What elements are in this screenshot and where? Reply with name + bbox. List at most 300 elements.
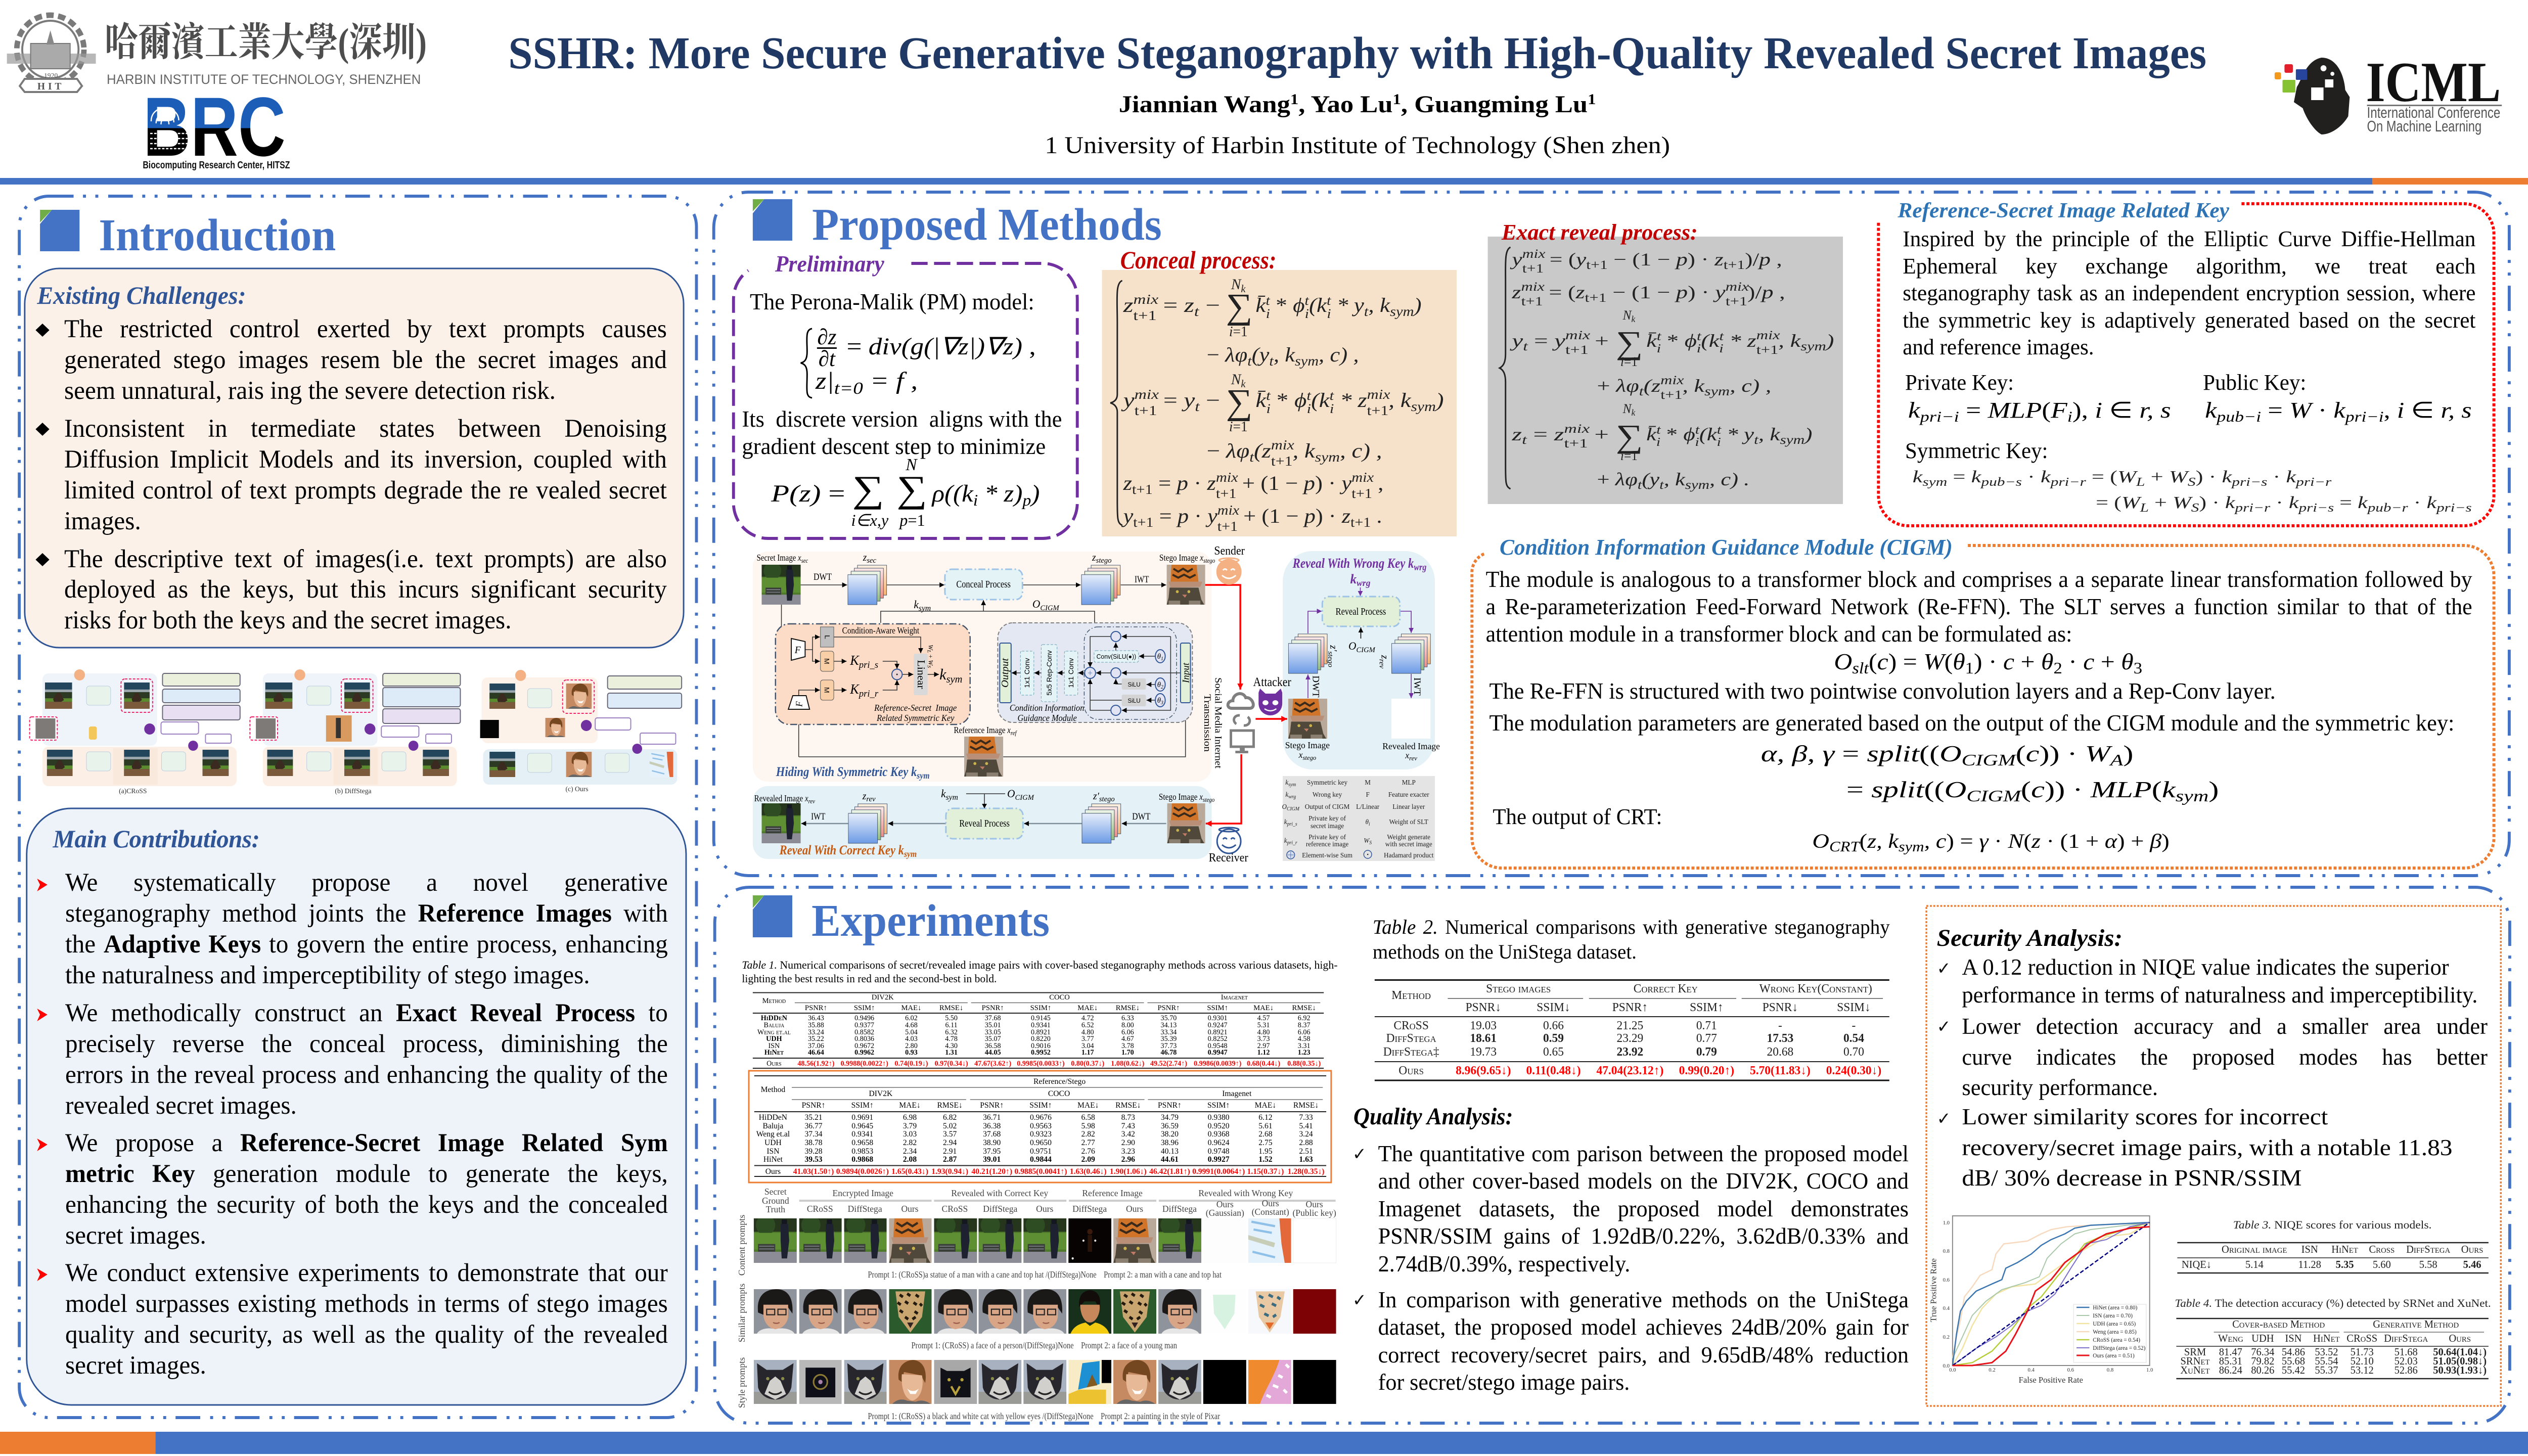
table 1b: reference/stego: 6.82	[943, 1113, 957, 1122]
logo: Harbin Institute of Technology: HIT	[37, 81, 64, 92]
formula: modulation: CIGM	[1962, 751, 2017, 769]
formula panel: exact reveal process: =	[1527, 424, 1554, 444]
table 1: secret/revealed: 4.68	[905, 1021, 918, 1029]
legend: symbols: wrg	[1288, 794, 1296, 800]
formula: SLT: c + θ	[2083, 649, 2132, 674]
text: quality point 1: Imagenet datasets, the proposed model demonstrates	[1378, 1196, 1909, 1221]
formula panel: conceal process: p) · z	[1304, 505, 1349, 527]
formula panel: conceal process: , k	[1292, 440, 1316, 462]
formula panel: exact reveal process: ∑	[1616, 325, 1643, 360]
legend: ROC: CRoSS (area = 0.54)	[2093, 1337, 2140, 1343]
formula panel: exact reveal process: p ,	[1762, 282, 1782, 302]
module: condition information guidance: Input	[1181, 662, 1191, 684]
table 1b: reference/stego: 8.73	[1121, 1113, 1135, 1122]
text: contribution 1: the naturalness and imperceptibility of stego images.	[65, 961, 590, 989]
logo text: english name: HARBIN INSTITUTE OF TECHNOLOGY, SHENZHEN	[107, 72, 421, 87]
legend: symbols: k	[1284, 837, 1287, 844]
authors: , Guangming Lu	[1401, 92, 1588, 118]
table 3: NIQE: ISN	[2301, 1244, 2318, 1255]
formula panel: conceal process: N	[1231, 372, 1241, 388]
formula panel: exact reveal process: ϕ	[1685, 331, 1694, 351]
table 4: detection accuracy: 54.86	[2282, 1347, 2305, 1358]
formula panel: exact reveal process: t	[1659, 478, 1664, 492]
legend: symbols: Element-wise Sum	[1302, 851, 1353, 859]
icon: section marker	[40, 210, 79, 251]
text: DWT: DWT	[1311, 675, 1321, 698]
formula: SLT: 2	[2053, 659, 2062, 677]
formula: SLT: O	[1834, 649, 1850, 674]
table 1: secret/revealed: 0.8252	[1208, 1035, 1228, 1043]
table 1: secret/revealed: 0.9985(0.0033↑)	[1017, 1060, 1065, 1068]
text: symmetric key: Symmetric Key:	[1905, 439, 2048, 463]
table 2: generative comparison: 0.65	[1543, 1045, 1564, 1059]
formula panel: exact reveal process: mix	[1522, 247, 1545, 261]
formula: symmetric key: k	[1971, 468, 1978, 486]
table 1b: reference/stego: Weng et.al	[756, 1130, 790, 1139]
table 2: generative comparison: Method	[1391, 989, 1431, 1002]
text: module description: a Re-parameterization Feed-Forward Network (Re-FFN). The SLT serves a function similar to that of the	[1486, 594, 2472, 619]
formula panel: exact reveal process: t+1	[1565, 343, 1589, 357]
formula panel: conceal process: t	[1327, 293, 1331, 308]
formula panel: exact reveal process: +	[1589, 331, 1609, 351]
caption: table 4: Table 4. The detection accuracy (%) detected by SRNet and XuNet.	[2175, 1297, 2491, 1309]
legend: symbols: Wrong key	[1313, 791, 1342, 798]
formula: modulation: c)) · MLP (k	[2031, 777, 2172, 802]
table 4: detection accuracy: Generative Method	[2373, 1319, 2459, 1330]
box: condition information guidance module	[1472, 535, 2494, 868]
formula: SLT: (	[1869, 649, 1877, 674]
formula: symmetric key: pri−s	[2297, 502, 2334, 515]
table 1b: reference/stego: 36.71	[983, 1113, 1001, 1122]
table 1: secret/revealed: 6.02	[905, 1014, 918, 1022]
table 1b: reference/stego: 39.53	[804, 1155, 823, 1164]
formula: CRT: sym	[1899, 839, 1924, 854]
formula panel: conceal process: k̄	[1255, 389, 1265, 412]
formula panel: exact reveal process: t+1	[1660, 388, 1682, 402]
module: reference-secret symmetric key	[776, 624, 970, 724]
formula: private key: i	[2067, 409, 2072, 425]
label: revealed image: rev	[1409, 755, 1417, 762]
image: stego cat	[1167, 565, 1205, 605]
logo: ICML	[2275, 51, 2502, 135]
table 1b: reference/stego: Imagenet	[1222, 1089, 1252, 1098]
module: condition information guidance: 5x5 Rep-Conv	[1045, 650, 1053, 696]
table 1: secret/revealed: 1.08(0.62↓)	[1111, 1060, 1145, 1068]
process: reveal	[946, 808, 1023, 839]
diagram: Ours	[480, 670, 682, 793]
table 1: secret/revealed: 0.9986(0.0039↑)	[1194, 1060, 1242, 1068]
label: k sym: k	[914, 599, 919, 611]
label: stego image: x	[1298, 750, 1303, 760]
table 1: secret/revealed: 6.06	[1298, 1028, 1311, 1036]
heading: preliminary: Preliminary	[775, 251, 885, 277]
table 1b: reference/stego: 1.15(0.37↓)	[1247, 1167, 1284, 1176]
table 1b: reference/stego: DIV2K	[869, 1089, 893, 1098]
heading: exact reveal process: Exact reveal process:	[1501, 220, 1698, 245]
formula panel: conceal process: , k	[1388, 389, 1412, 412]
formula panel: exact reveal process: t+1	[1585, 291, 1607, 305]
text: sender: Sender	[1214, 544, 1245, 558]
table 1: secret/revealed: 8.00	[1121, 1021, 1134, 1029]
panel: proposed methods	[714, 192, 2509, 876]
table 4: detection accuracy: 51.73	[2351, 1347, 2374, 1358]
table 1b: reference/stego: PSNR↑	[1158, 1101, 1182, 1110]
icon: receiver face	[1217, 828, 1241, 853]
formula: public key: ,	[2384, 398, 2397, 423]
legend: symbols: O	[1282, 803, 1287, 810]
table 1: secret/revealed: SSIM↑	[1207, 1004, 1228, 1012]
table 1: secret/revealed: 1.12	[1257, 1049, 1270, 1057]
module: condition information guidance: Guidance Module	[1018, 713, 1077, 723]
module: reference-secret symmetric key: S	[926, 665, 932, 668]
grid headers: (Gaussian)	[1206, 1208, 1244, 1218]
table 1b: reference/stego: Ours	[765, 1167, 781, 1176]
formula panel: conceal process: t+1	[1133, 515, 1154, 530]
table 1: secret/revealed: 49.52(2.74↑)	[1150, 1060, 1187, 1068]
table 1: secret/revealed: MAE↓	[1077, 1004, 1098, 1012]
table 1: secret/revealed: 0.9947	[1208, 1049, 1228, 1057]
process: conceal: Conceal Process	[956, 579, 1011, 590]
table 1b: reference/stego: 0.9853	[851, 1147, 873, 1156]
module: condition information guidance: 1x1 Conv	[1023, 658, 1031, 688]
grid headers: DiffStega	[1162, 1204, 1197, 1214]
icon: sync arrows	[1234, 715, 1250, 725]
formula: PM model: = div(g(|∇z|)∇z) ,	[846, 334, 1036, 360]
text: contribution 2: errors in the reveal process and enhancing the quality of the	[65, 1060, 668, 1088]
icon: section marker	[753, 895, 792, 937]
icon: section marker	[753, 199, 792, 241]
table 1b: reference/stego: 37.68	[983, 1130, 1001, 1139]
text: contribution 3: secret images.	[65, 1220, 206, 1249]
table 2: generative comparison: 47.04(23.12↑)	[1597, 1064, 1663, 1077]
legend: symbols: pri_s	[1287, 822, 1297, 827]
table 1b: reference/stego: 2.08	[903, 1155, 917, 1164]
formula panel: conceal process: * z	[1334, 389, 1367, 412]
text: security point 3	[1962, 1104, 2453, 1191]
formula panel: exact reveal process: t+1	[1726, 295, 1747, 308]
module: reference-secret symmetric key: K	[850, 653, 859, 668]
table 1: secret/revealed: 33.34	[1161, 1028, 1177, 1036]
table 4: detection accuracy: 51.68	[2395, 1347, 2418, 1358]
text: contribution 1	[65, 867, 668, 993]
text: module description	[1486, 566, 2472, 652]
formula panel: conceal process: p · y	[1178, 505, 1216, 527]
table 1b: reference/stego: 2.88	[1299, 1139, 1313, 1147]
table 1: secret/revealed: 6.52	[1081, 1021, 1094, 1029]
table 1b: reference/stego: PSNR↑	[980, 1101, 1004, 1110]
table 1: secret/revealed: Ours	[766, 1060, 782, 1068]
heading: main contributions: Main Contributions:	[53, 825, 260, 853]
formula: public key: i ∈ r, s	[2397, 398, 2466, 423]
formula panel: exact reveal process: ∑	[1616, 418, 1643, 454]
module: reference-secret symmetric key: pri_r	[858, 689, 879, 699]
table 1: secret/revealed: 33.24	[808, 1028, 824, 1036]
legend: symbols: pri_r	[1287, 840, 1297, 846]
table 1: secret/revealed: 0.68(0.44↓)	[1247, 1060, 1280, 1068]
formula panel: conceal process: mix	[1367, 387, 1390, 402]
module: reference-secret symmetric key: K	[850, 681, 859, 697]
table 1b: reference/stego: 38.96	[1161, 1139, 1179, 1147]
grid headers: Ours	[901, 1204, 919, 1214]
chart: ROC curves: 0.4	[1943, 1305, 1950, 1311]
text: contribution 3	[65, 1127, 668, 1254]
formula: symmetric key: +	[2145, 468, 2169, 486]
icon: security check marks: ✓	[1937, 1018, 1951, 1036]
formula panel: conceal process: y	[1123, 505, 1132, 527]
table 1: secret/revealed: 46.78	[1161, 1049, 1177, 1057]
text: contribution 4	[65, 1257, 668, 1383]
chart: ROC curves	[1929, 1216, 2153, 1385]
table 1b: reference/stego: RMSE↓	[1293, 1101, 1319, 1110]
formula: modulation	[1761, 741, 2219, 805]
legend: symbols: M	[1365, 779, 1371, 786]
table 1b: reference/stego: 2.34	[903, 1147, 917, 1156]
formula: CRT: CRT	[1829, 839, 1861, 854]
row: style prompts: Style prompts	[737, 1357, 747, 1408]
process: reveal wrong key: Reveal Process	[1336, 606, 1386, 617]
module: condition information guidance: 3	[1160, 700, 1163, 706]
caption: table 1: lighting the best results in red and the second-best in bold.	[742, 973, 997, 985]
formula panel: exact reveal process: p) · y	[1676, 282, 1723, 302]
chart: ROC curves: False Positive Rate	[2019, 1375, 2083, 1385]
formula panel: exact reveal process: )	[1803, 424, 1812, 444]
table 1b: reference/stego: 1.52	[1258, 1155, 1273, 1164]
table 1: secret/revealed: 0.9496	[854, 1014, 874, 1022]
row: similar prompts: Similar prompts	[737, 1284, 747, 1342]
formula: SLT: 1	[1965, 659, 1974, 677]
table 1b: reference/stego: SSIM↑	[1207, 1101, 1230, 1110]
table 1: secret/revealed: 4.80	[1081, 1028, 1094, 1036]
label: O CIGM: CIGM	[1356, 646, 1376, 654]
arrows: wrong key path	[1308, 587, 1411, 698]
text: public key: Public Key:	[2203, 371, 2306, 395]
formula: symmetric key: pub−s	[1980, 476, 2022, 489]
text: key description	[1903, 225, 2475, 365]
label: reference image: ref	[1011, 730, 1018, 737]
chart: ROC curves: 0.8	[1943, 1248, 1950, 1254]
formula panel: conceal process: =	[1153, 472, 1177, 494]
text: challenge 3	[64, 543, 667, 639]
text: contribution 4: secret images.	[65, 1351, 206, 1379]
grid headers: Secret	[764, 1187, 787, 1197]
table 1b: reference/stego: 1.95	[1258, 1147, 1273, 1156]
table 4: detection accuracy: 50.93(1.93↓)	[2433, 1365, 2487, 1376]
caption: table 1: Table 1. Numerical comparisons of secret/revealed image pairs with cover-based steganography methods across various datasets, high-	[742, 959, 1338, 971]
text: private key: Private Key:	[1905, 371, 2014, 395]
formula: PM model: = f ,	[863, 368, 918, 394]
table 1: secret/revealed: 0.9016	[1031, 1042, 1051, 1050]
table 1: secret/revealed: 4.30	[945, 1042, 958, 1050]
grid headers: Encrypted Image	[832, 1188, 893, 1198]
table 4: detection accuracy: 86.24	[2219, 1365, 2243, 1376]
image: stego cat	[1288, 699, 1327, 739]
icon: bullet diamonds	[35, 324, 50, 566]
emblem: HIT gear	[7, 15, 96, 92]
table 4: detection accuracy: 79.82	[2251, 1356, 2274, 1367]
formula panel: conceal process	[1102, 270, 1457, 536]
chart: ROC curves: 0.6	[2067, 1367, 2074, 1373]
table 1b: reference/stego: PSNR↑	[802, 1101, 825, 1110]
text: IWT: IWT	[1412, 677, 1422, 696]
table 4: detection accuracy: 53.12	[2351, 1365, 2374, 1376]
table 2: generative comparison: DiffStega‡	[1383, 1045, 1439, 1059]
formula: symmetric key: +	[2149, 493, 2173, 512]
formula: modulation: = split ((O	[1846, 777, 1961, 802]
label: revealed image: x	[1405, 750, 1409, 760]
table 1: secret/revealed: SSIM↑	[1030, 1004, 1051, 1012]
formula: public key: k	[2205, 398, 2215, 423]
label: z rev: rev	[866, 795, 876, 803]
formula panel: exact reveal process: t+1	[1724, 258, 1745, 272]
module: condition information guidance: SiLU	[1127, 697, 1141, 704]
formula: symmetric key: ·	[2267, 468, 2286, 486]
label: reveal with wrong key: wrg	[1414, 562, 1426, 573]
table 4: detection accuracy: 55.68	[2282, 1356, 2305, 1367]
flowchart: reveal with wrong key	[1283, 551, 1440, 769]
formula panel: exact reveal process: )/	[1745, 249, 1759, 269]
formula: private key: MLP (F	[1988, 398, 2064, 423]
heading: Experiments: Experiments	[811, 896, 1050, 946]
formula panel: exact reveal process: , k	[1758, 424, 1781, 444]
formula panel: conceal process: z	[1123, 472, 1131, 494]
formula panel: conceal process: )	[1413, 294, 1422, 316]
formula panel: exact reveal process: , k	[1778, 331, 1801, 351]
label: k sym and O CIGM inputs: k	[941, 788, 946, 800]
formula: SLT: ·	[2062, 649, 2083, 674]
label: z sec: z	[863, 552, 867, 563]
table 1: secret/revealed: 0.9672	[854, 1042, 874, 1050]
formula panel: conceal process: i	[1330, 401, 1334, 416]
table 1: secret/revealed: 35.22	[808, 1035, 824, 1043]
formula: CRT: ) = γ · N(z · (1 + α) + β)	[1946, 830, 2168, 852]
formula: CRT: (	[1860, 830, 1867, 852]
table 1: secret/revealed: 1.17	[1081, 1049, 1094, 1057]
formula panel: exact reveal process: mix	[1660, 374, 1684, 387]
legend: symbols: with secret image	[1385, 840, 1432, 848]
formula: PM model: ∂z	[817, 325, 836, 349]
table 4: detection accuracy: 55.42	[2282, 1365, 2305, 1376]
formula panel: exact reveal process: + λφ	[1597, 376, 1634, 396]
formula panel: conceal process: mix	[1217, 503, 1239, 518]
table 1: secret/revealed: 46.64	[808, 1049, 824, 1057]
formula: SLT: c) = W(θ	[1877, 649, 1964, 674]
table 1: secret/revealed: RMSE↓	[1292, 1004, 1316, 1012]
formula panel: exact reveal process: t	[1522, 433, 1528, 447]
table 3: NIQE: 5.35	[2336, 1259, 2354, 1270]
formula: modulation: α, β, γ = split ((O	[1761, 741, 1956, 766]
heading: Proposed Methods: Proposed Methods	[812, 200, 1162, 250]
grid headers: Ours	[1126, 1204, 1143, 1214]
legend: symbols: S	[1369, 840, 1372, 846]
table 1: secret/revealed: RMSE↓	[1116, 1004, 1140, 1012]
table 4: detection accuracy: 53.52	[2315, 1347, 2338, 1358]
formula panel: conceal process: mix	[1216, 470, 1238, 485]
title: SSHR: More Secure Generative Steganography with High-Quality Revealed Secret Images	[508, 28, 2206, 78]
table 1: secret/revealed: 0.8921	[1208, 1028, 1228, 1036]
table 2: generative comparison: 0.79	[1696, 1045, 1717, 1059]
module: condition information guidance: SiLU	[1127, 681, 1141, 688]
module: condition information guidance	[998, 623, 1192, 723]
table 1b: reference/stego: HiNet	[763, 1155, 783, 1164]
diagram: DiffStega: (b) DiffStega	[335, 787, 372, 795]
table 1b: reference/stego: COCO	[1048, 1089, 1070, 1098]
formula panel: conceal process: + (1 −	[1237, 472, 1304, 494]
module: reference-secret symmetric key: F	[794, 701, 804, 707]
table 1: secret/revealed: HiDDeN	[761, 1014, 788, 1022]
arrows: reveal path	[801, 823, 1166, 824]
text: security point 2: Lower detection accuracy and a smaller area under	[1962, 1013, 2488, 1039]
table 2: generative comparison: 0.54	[1843, 1032, 1864, 1045]
formula panel: conceal process: t	[1269, 353, 1274, 369]
table 2: generative comparison: PSNR↓	[1763, 1001, 1798, 1014]
formula panel: exact reveal process: p ,	[1759, 249, 1780, 269]
table 1b: reference/stego: 3.03	[903, 1130, 917, 1139]
formula panel: exact reveal process: *	[1660, 424, 1683, 444]
formula panel: exact reveal process: t	[1523, 340, 1528, 353]
formula: symmetric key: =	[1947, 468, 1971, 486]
table 1b: reference/stego: 39.28	[804, 1147, 823, 1156]
table 3: NIQE	[2177, 1243, 2489, 1273]
grid headers: Reference Image	[1082, 1188, 1143, 1198]
formula panel: exact reveal process: z	[1554, 424, 1561, 444]
formula: PM model: ∂t	[819, 347, 836, 371]
table 1b: reference/stego: 3.42	[1121, 1130, 1135, 1139]
flowchart: hiding with symmetric key	[753, 552, 1215, 782]
label: k wrg: k	[1350, 572, 1357, 586]
text: challenge 1: The restricted control exerted by text prompts causes	[64, 314, 667, 343]
table 1: secret/revealed: 1.31	[945, 1049, 958, 1057]
text: challenge 1	[64, 313, 667, 410]
text: quality point 2: dataset, the proposed model achieves 24dB/20% gain for	[1378, 1314, 1909, 1340]
text: output of CRT: The output of CRT:	[1493, 805, 1662, 829]
header bar	[0, 178, 2528, 185]
formula panel: exact reveal process: ϕ	[1683, 424, 1693, 444]
formula panel: exact reveal process: = (	[1543, 282, 1575, 302]
formula panel: exact reveal process: t	[1638, 478, 1643, 492]
table 1: secret/revealed: 3.77	[1081, 1035, 1094, 1043]
text: security point 1: A 0.12 reduction in NIQE value indicates the superior	[1962, 954, 2449, 980]
table 1: secret/revealed: MAE↓	[901, 1004, 921, 1012]
formula panel: conceal process: .	[1371, 505, 1382, 527]
grid headers	[762, 1187, 1336, 1218]
table 2: generative comparison: Ours	[1398, 1064, 1424, 1077]
table 1b: reference/stego: 0.9650	[1030, 1139, 1052, 1147]
formula panel: conceal process: ϕ	[1294, 389, 1304, 412]
formula: symmetric key: L	[2136, 476, 2145, 489]
grid headers: (Public key)	[1292, 1208, 1336, 1218]
table 1: secret/revealed: 5.50	[945, 1014, 958, 1022]
table 2: generative comparison: -	[1852, 1019, 1856, 1032]
formula: P(z): i	[973, 491, 978, 509]
grid headers: Revealed with Correct Key	[951, 1188, 1048, 1198]
table 1: secret/revealed: 4.03	[905, 1035, 918, 1043]
table 2: generative comparison: 0.24(0.30↓)	[1826, 1064, 1881, 1077]
table 1: secret/revealed: COCO	[1049, 993, 1070, 1002]
panel: introduction	[19, 196, 696, 1418]
chart: ROC curves: 0.8	[2107, 1367, 2114, 1373]
logo text: university name: 哈爾濱工業大學(深圳)	[105, 20, 427, 64]
formula panel: conceal process: p · z	[1177, 472, 1215, 494]
legend: symbols: secret image	[1311, 822, 1344, 830]
formula panel: conceal process: i	[1305, 306, 1309, 321]
table 4: detection accuracy: HiNet	[2313, 1333, 2340, 1344]
table 1b: reference/stego: 1.63(0.46↓)	[1070, 1167, 1107, 1176]
table 1b: reference/stego: 1.63	[1299, 1155, 1313, 1164]
label: z stego prime: stego	[1326, 651, 1334, 667]
label: secret image: sec	[801, 557, 808, 564]
module: reference-secret symmetric key: Reference-Secret Image	[874, 703, 957, 713]
table 4: detection accuracy: Weng	[2218, 1333, 2243, 1344]
